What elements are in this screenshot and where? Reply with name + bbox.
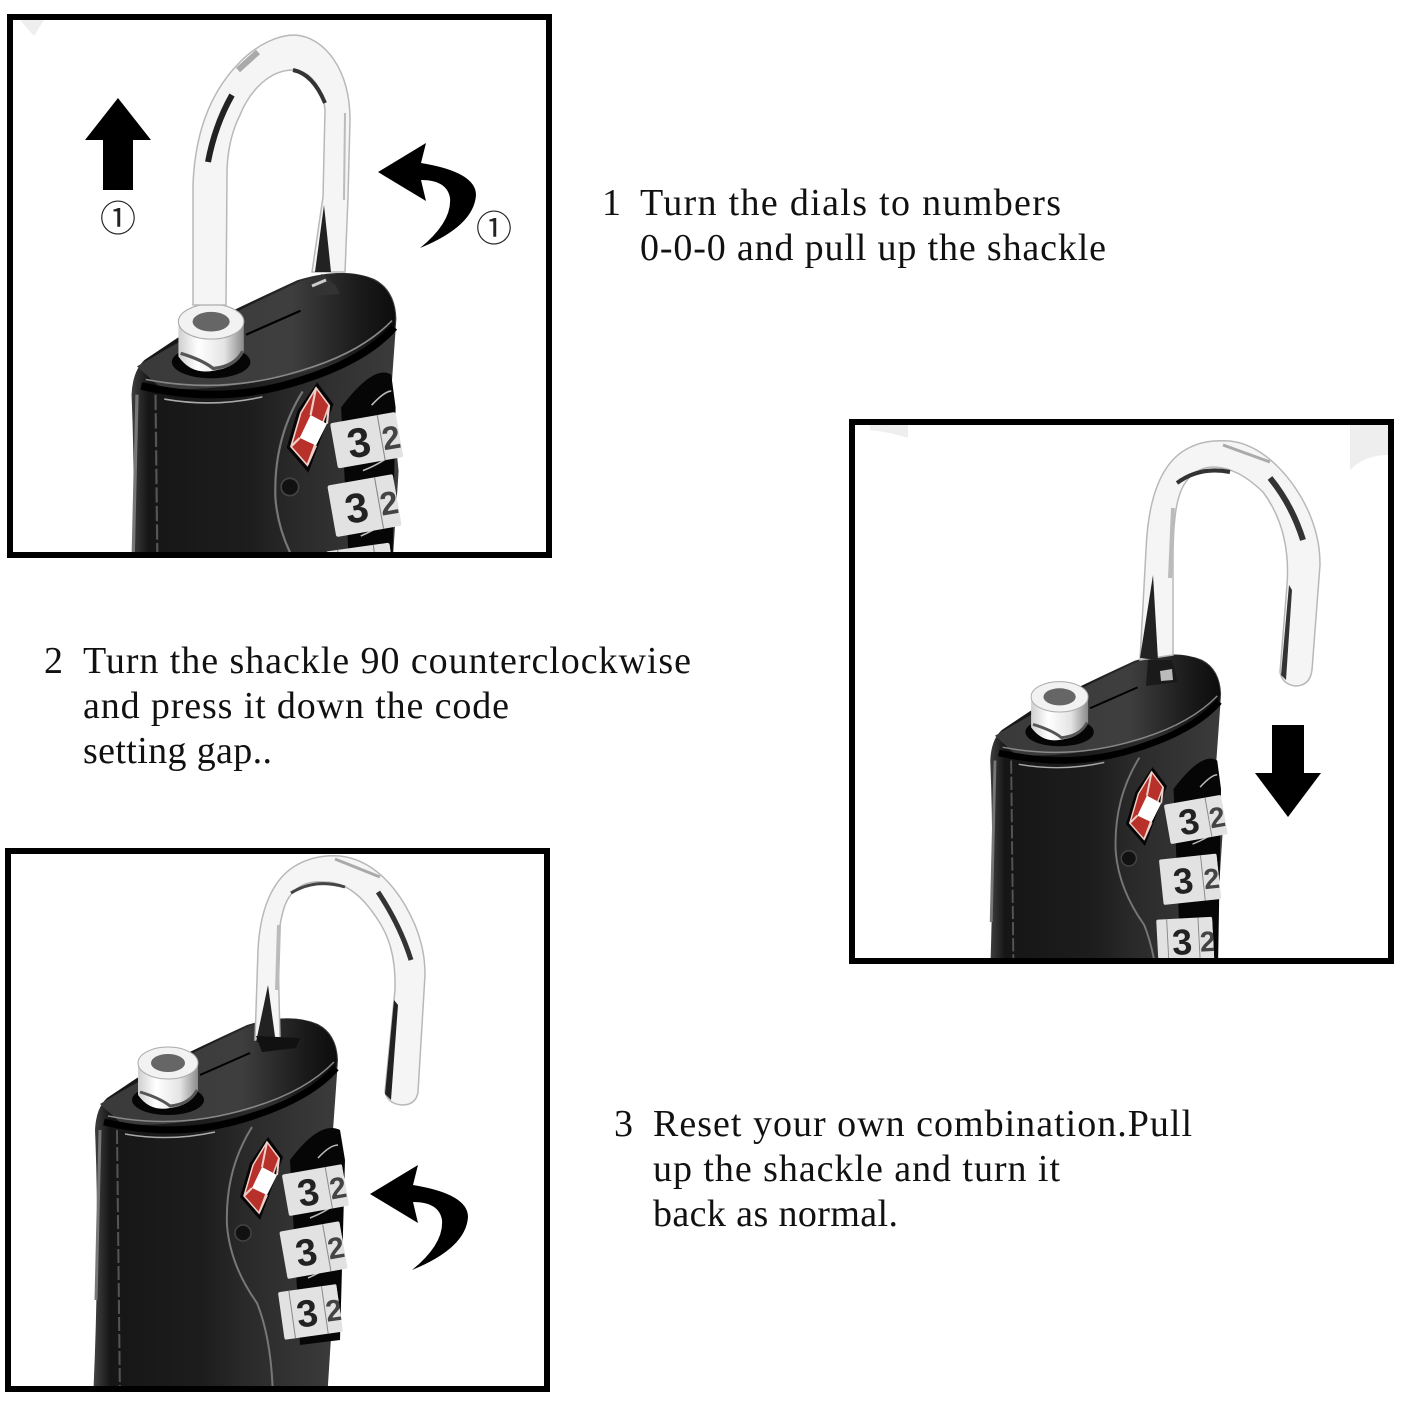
combination dials and TSA emblem: 2 <box>377 483 401 523</box>
lock body <box>990 654 1222 958</box>
combination dials and TSA emblem: 3 <box>1171 921 1193 963</box>
combination dials and TSA emblem: 3 <box>344 418 374 468</box>
step 3 text: up the shackle and turn it <box>653 1148 1060 1190</box>
arrow: counterclockwise turn <box>378 143 476 248</box>
combination dials and TSA emblem: 3 <box>1171 859 1195 902</box>
step 1 text: 1 <box>602 182 621 224</box>
lock body <box>132 272 399 552</box>
marker: circled one right: ① <box>476 209 512 249</box>
combination dials and TSA emblem: 2 <box>324 1294 345 1329</box>
shackle <box>193 35 350 305</box>
combination dials and TSA emblem: 2 <box>1207 801 1228 835</box>
panel 1: pull up the shackle <box>7 14 552 558</box>
step 2 text: and press it down the code <box>83 685 509 727</box>
combination dials and TSA emblem: 3 <box>294 1171 323 1216</box>
combination dials and TSA emblem: 2 <box>325 1231 347 1266</box>
step 2 text: setting gap.. <box>83 730 272 772</box>
lock body <box>93 1018 340 1400</box>
shackle <box>255 856 425 1105</box>
lock collar <box>1025 682 1094 746</box>
combination dials and TSA emblem: 2 <box>1202 863 1221 896</box>
combination dials and TSA emblem: 2 <box>1199 926 1217 959</box>
shackle <box>1140 441 1320 686</box>
combination dials and TSA emblem <box>235 1128 350 1345</box>
lock collar <box>132 1047 204 1115</box>
combination dials and TSA emblem: 3 <box>292 1231 321 1276</box>
combination dials and TSA emblem: 3 <box>294 1292 321 1337</box>
combination dials and TSA emblem: 2 <box>327 1171 349 1206</box>
step 1 text: 0-0-0 and pull up the shackle <box>640 227 1106 269</box>
arrow: down <box>1255 725 1321 817</box>
step 1 text: Turn the dials to numbers <box>640 182 1061 224</box>
step 1 text <box>602 182 1106 269</box>
combination dials and TSA emblem: 3 <box>343 550 372 599</box>
step 3 text: 3 <box>614 1103 633 1145</box>
lock collar <box>172 304 250 378</box>
step 3 text <box>614 1103 1192 1235</box>
combination dials and TSA emblem: 2 <box>375 551 398 591</box>
step 3 text: Reset your own combination.Pull <box>653 1103 1192 1145</box>
step 3 text: back as normal. <box>653 1193 898 1235</box>
panel 3: reset and turn back <box>8 851 547 1400</box>
step 2 text: Turn the shackle 90 counterclockwise <box>83 640 691 682</box>
combination dials and TSA emblem: 2 <box>379 418 403 457</box>
panel 2: press the shackle down <box>852 422 1391 1017</box>
combination dials and TSA emblem <box>1120 758 1228 958</box>
combination dials and TSA emblem <box>280 372 403 552</box>
arrow: up <box>85 98 151 190</box>
step 2 text: 2 <box>44 640 63 682</box>
marker: circled one left: ① <box>100 199 136 239</box>
arrow: turn back <box>370 1165 468 1270</box>
step 2 text <box>44 640 691 772</box>
combination dials and TSA emblem: 3 <box>341 484 372 533</box>
combination dials and TSA emblem: 3 <box>1176 800 1202 843</box>
